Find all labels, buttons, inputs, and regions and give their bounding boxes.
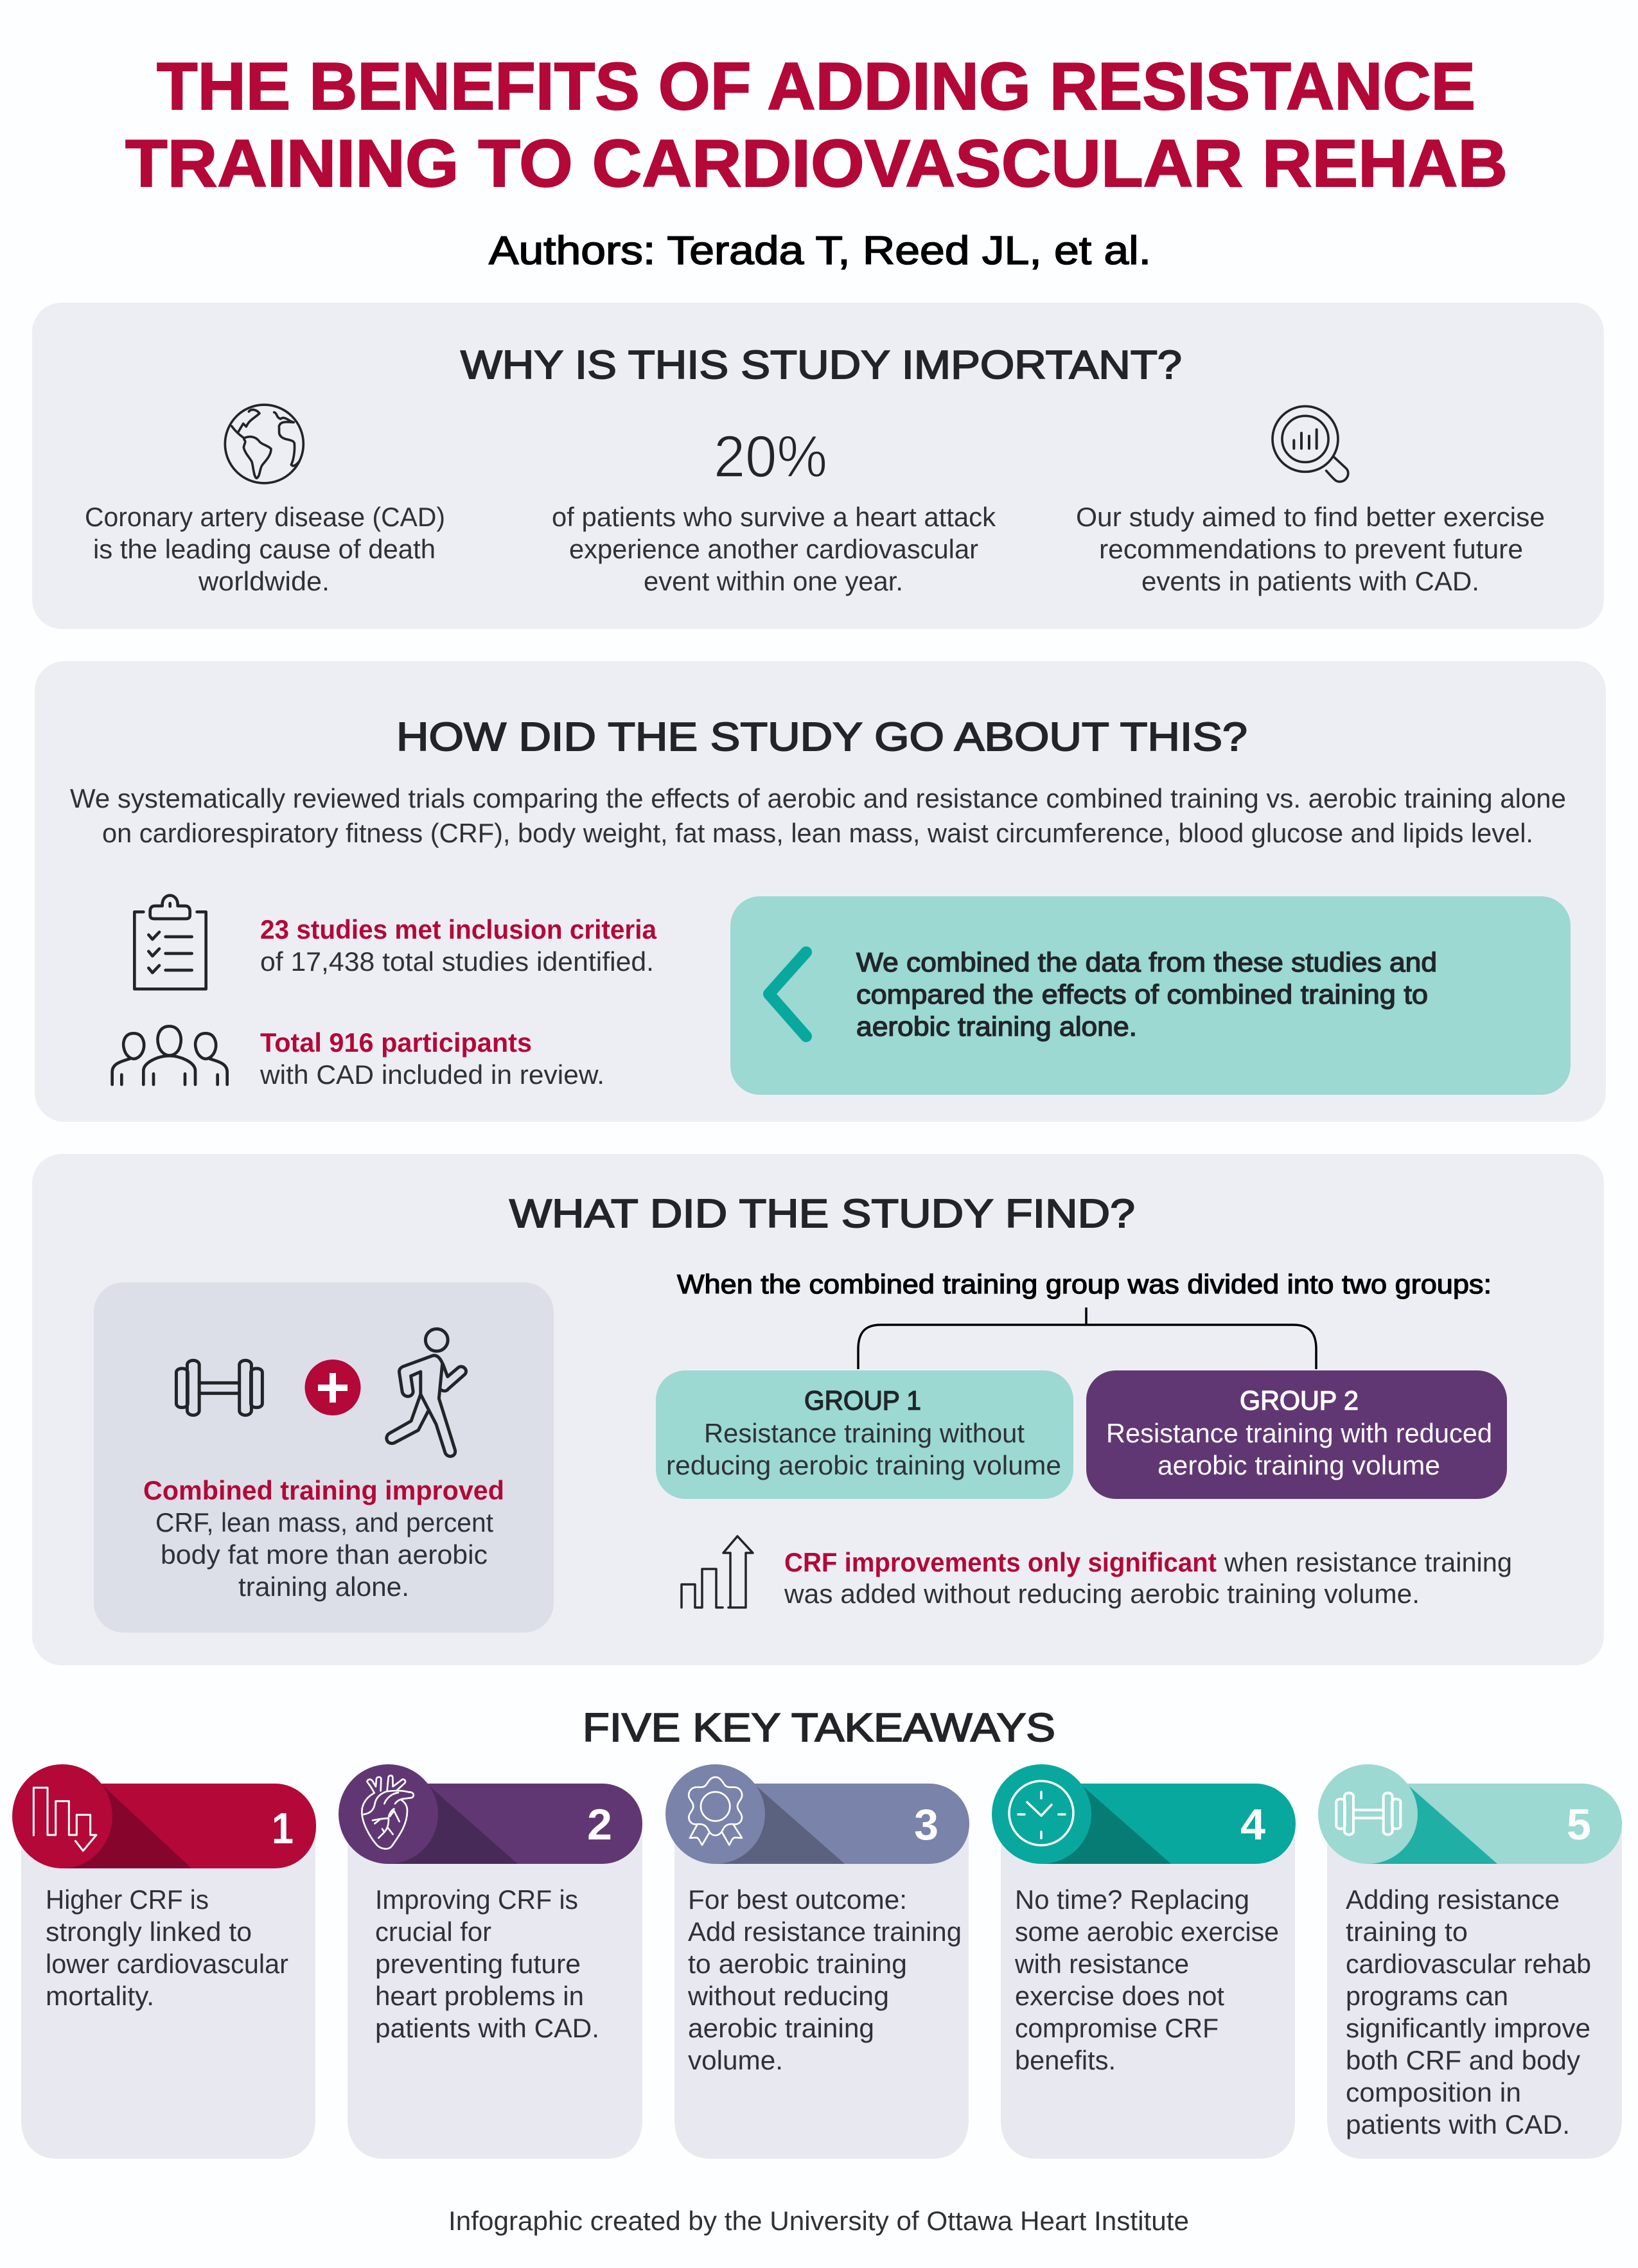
text: takeaway 5: patients with CAD. — [1346, 2109, 1570, 2140]
icon: chevron — [769, 952, 806, 1036]
ribbon shadow — [716, 1784, 845, 1864]
text: column 1: is the leading cause of death — [93, 534, 436, 564]
authors: Authors: Terada T, Reed JL, et al. — [489, 229, 1151, 273]
icon: magnifier with bars — [1273, 406, 1348, 482]
text: combined improved: body fat more than aerobic — [161, 1539, 488, 1570]
text: takeaway 1: strongly linked to — [46, 1917, 252, 1947]
text: takeaway 4: some aerobic exercise — [1015, 1917, 1279, 1947]
icon: heart — [362, 1775, 414, 1849]
icon: group of people — [112, 1026, 227, 1085]
text: methods paragraph: on cardiorespiratory fitness (CRF), body weight, fat mass, lean mass, waist circumference, blood glucose and lipids level. — [102, 818, 1533, 848]
text: takeaway 2: Improving CRF is — [375, 1884, 578, 1915]
text: combined improved: CRF, lean mass, and percent — [155, 1507, 493, 1537]
ribbon shadow — [1368, 1784, 1497, 1864]
card 1 — [12, 1764, 316, 2159]
text: takeaway 5: Adding resistance — [1346, 1884, 1560, 1915]
text: callout: We combined the data from these studies and — [856, 947, 1437, 977]
heading: what: WHAT DID THE STUDY FIND? — [509, 1192, 1135, 1236]
footer credit: Infographic created by the University of Ottawa Heart Institute — [448, 2206, 1189, 2236]
text: takeaway 5: cardiovascular rehab — [1346, 1949, 1591, 1979]
card 2 — [339, 1764, 642, 2159]
text: takeaway 4: No time? Replacing — [1015, 1884, 1249, 1915]
number 1: 1 — [272, 1804, 294, 1853]
text: methods paragraph — [70, 783, 1566, 848]
text: column 3 — [1076, 502, 1545, 596]
title — [125, 49, 1508, 201]
number 3: 3 — [914, 1800, 938, 1849]
icon: clock — [1009, 1781, 1073, 1845]
text: takeaway 3: without reducing — [687, 1981, 889, 2011]
text: column 2: of patients who survive a heart attack — [552, 502, 996, 532]
text: column 1: worldwide. — [198, 566, 330, 596]
text: takeaway 4 — [1014, 1884, 1279, 2075]
text: participants stat — [260, 1027, 604, 1090]
text: takeaway 5 — [1346, 1884, 1591, 2140]
box: group 2: GROUP 2 — [1240, 1385, 1359, 1415]
text: CRF result: was added without reducing aerobic training volume. — [784, 1579, 1420, 1609]
icon: rising bars with arrow — [682, 1536, 753, 1608]
card 5 — [1318, 1764, 1622, 2159]
text: methods paragraph: We systematically reviewed trials comparing the effects of aerobic and resistance combined training vs. aerobic training alone — [70, 783, 1566, 813]
ribbon shadow — [62, 1784, 191, 1868]
sub-panel: combined training — [94, 1282, 554, 1633]
text: takeaway 2: heart problems in — [375, 1981, 584, 2011]
number 5: 5 — [1567, 1800, 1591, 1849]
text: column 2 — [552, 502, 996, 596]
ribbon shadow — [1042, 1784, 1171, 1864]
text: studies stat: 23 studies met inclusion criteria — [260, 914, 657, 944]
text: column 1: Coronary artery disease (CAD) — [85, 502, 445, 532]
text: participants stat: Total 916 participants — [260, 1027, 532, 1058]
text: takeaway 1: mortality. — [46, 1981, 154, 2011]
icon: dumbbell white — [1336, 1793, 1400, 1835]
number 4: 4 — [1240, 1800, 1265, 1849]
title: THE BENEFITS OF ADDING RESISTANCE — [157, 49, 1475, 124]
text: takeaway 2: crucial for — [375, 1917, 491, 1947]
box: group 2: aerobic training volume — [1158, 1450, 1440, 1480]
text: column 1 — [85, 502, 445, 596]
text: callout: aerobic training alone. — [856, 1011, 1137, 1041]
text: takeaway 3: to aerobic training — [688, 1949, 907, 1979]
callout: combined data — [730, 896, 1571, 1095]
box: group 2 — [1086, 1370, 1507, 1499]
text: groups intro: When the combined training group was divided into two groups: — [677, 1269, 1492, 1299]
heading: how: HOW DID THE STUDY GO ABOUT THIS? — [396, 715, 1247, 759]
text: studies stat: of 17,438 total studies identified. — [260, 946, 654, 977]
icon: globe — [225, 405, 303, 483]
text: takeaway 2: patients with CAD. — [375, 2013, 599, 2043]
text: takeaway 4: with resistance — [1014, 1949, 1189, 1979]
heading: five key takeaways: FIVE KEY TAKEAWAYS — [583, 1706, 1055, 1750]
text: takeaway 3: Add resistance training — [688, 1917, 962, 1947]
box: group 1 — [656, 1370, 1073, 1499]
icon: plus — [304, 1360, 361, 1415]
text: takeaway 3 — [687, 1884, 962, 2075]
panel: why is this study important — [32, 303, 1604, 629]
text: takeaway 3: For best outcome: — [688, 1884, 907, 1915]
text: takeaway 5: composition in — [1346, 2077, 1521, 2107]
text: takeaway 5: both CRF and body — [1346, 2045, 1580, 2075]
text: takeaway 5: significantly improve — [1346, 2013, 1590, 2043]
text: combined improved: training alone. — [238, 1572, 409, 1602]
heading: why: WHY IS THIS STUDY IMPORTANT? — [461, 343, 1182, 387]
text: takeaway 2 — [375, 1884, 599, 2043]
text: participants stat: with CAD included in review. — [260, 1059, 604, 1090]
text: takeaway 1: lower cardiovascular — [46, 1949, 288, 1979]
text: takeaway 1 — [46, 1884, 288, 2011]
text: combined improved: Combined training improved — [143, 1475, 504, 1505]
box: group 1: Resistance training without — [704, 1418, 1025, 1448]
text: column 3: events in patients with CAD. — [1141, 566, 1479, 596]
stat: 20%: 20% — [714, 424, 827, 490]
text: takeaway 3: aerobic training — [688, 2013, 874, 2043]
text: callout — [856, 947, 1437, 1041]
box: group 2: Resistance training with reduced — [1106, 1418, 1492, 1448]
text: column 2: experience another cardiovascular — [569, 534, 978, 564]
text: CRF result — [784, 1547, 1512, 1609]
icon: rosette — [689, 1777, 742, 1845]
text: combined improved — [143, 1475, 504, 1602]
icon: runner — [387, 1329, 466, 1457]
icon: bars falling — [33, 1787, 96, 1851]
text: takeaway 4: compromise CRF — [1015, 2013, 1219, 2043]
text: column 3: recommendations to prevent future — [1099, 534, 1523, 564]
text: callout: compared the effects of combined training to — [856, 979, 1428, 1009]
bracket connector — [858, 1307, 1316, 1369]
card 3 — [665, 1764, 969, 2159]
box: group 1: reducing aerobic training volume — [666, 1450, 1061, 1480]
icon: clipboard checklist — [134, 896, 206, 989]
text: column 2: event within one year. — [644, 566, 903, 596]
text: CRF result: CRF improvements only significant — [784, 1547, 1217, 1577]
text: takeaway 2: preventing future — [375, 1949, 581, 1979]
text: takeaway 3: volume. — [688, 2045, 783, 2075]
text: CRF result: when resistance training — [1224, 1547, 1512, 1577]
panel: what did the study find — [32, 1154, 1604, 1665]
text: takeaway 1: Higher CRF is — [46, 1884, 209, 1915]
text: takeaway 4: exercise does not — [1015, 1981, 1224, 2011]
text: studies stat — [260, 914, 657, 977]
panel: how did the study go about this — [35, 661, 1606, 1122]
ribbon shadow — [389, 1784, 518, 1864]
card 4 — [992, 1764, 1296, 2159]
text: column 3: Our study aimed to find better exercise — [1076, 502, 1545, 532]
icon: dumbbell — [176, 1360, 262, 1415]
number 2: 2 — [587, 1800, 612, 1849]
title: TRAINING TO CARDIOVASCULAR REHAB — [125, 127, 1508, 201]
text: takeaway 4: benefits. — [1015, 2045, 1116, 2075]
text: takeaway 5: training to — [1346, 1917, 1468, 1947]
text: takeaway 5: programs can — [1346, 1981, 1508, 2011]
box: group 1: GROUP 1 — [804, 1385, 921, 1415]
